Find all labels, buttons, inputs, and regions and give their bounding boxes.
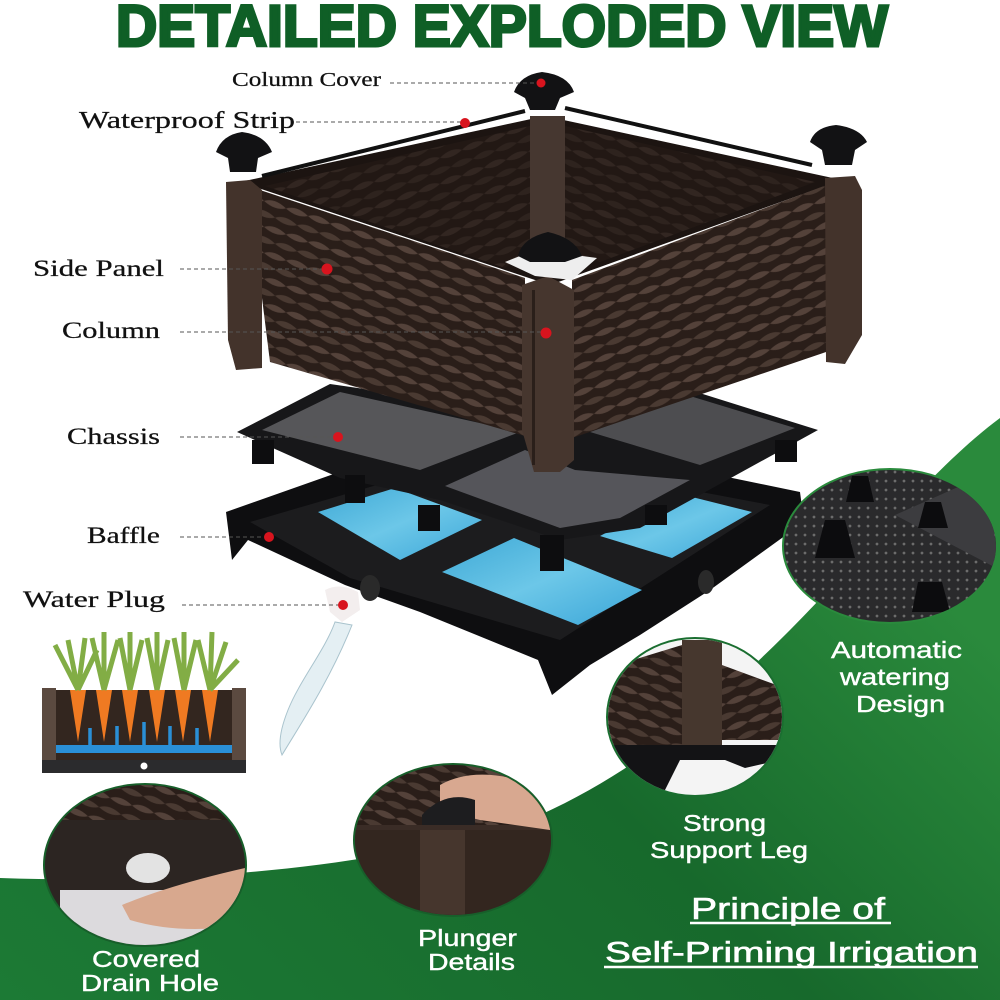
label: Column Cover — [232, 69, 546, 91]
back column — [530, 116, 565, 246]
text: Automatic watering Design: Automatic — [831, 637, 962, 663]
label: Waterproof Strip: Waterproof Strip — [79, 108, 295, 134]
text: Principle of Self-Priming Irrigation: Self-Priming Irrigation — [605, 937, 978, 969]
label: Chassis — [67, 424, 343, 449]
carrots — [70, 690, 218, 742]
white rim strips — [505, 252, 597, 280]
circle: plunger details — [353, 763, 555, 920]
right side panel — [572, 183, 832, 438]
circle: covered drain hole — [40, 780, 250, 950]
label: Column: Column — [62, 318, 161, 343]
label: Chassis: Chassis — [67, 424, 160, 449]
label: Column — [62, 318, 552, 343]
text: Strong Support Leg: Strong — [683, 810, 766, 836]
planter exploded illustration — [226, 116, 862, 695]
text: Covered Drain Hole: Covered — [92, 946, 200, 972]
label: Column Cover: Column Cover — [232, 69, 381, 91]
text: Covered Drain Hole — [81, 946, 219, 996]
planter inner walls — [240, 116, 842, 285]
text: Strong Support Leg — [650, 810, 808, 863]
columns — [226, 180, 262, 370]
circle: strong support leg — [600, 637, 790, 797]
label: Baffle — [87, 523, 274, 548]
water stream — [280, 622, 352, 755]
blue arrows — [90, 722, 197, 746]
text: Automatic watering Design — [831, 637, 962, 717]
column cover icons — [216, 72, 867, 262]
text: Plunger Details: Plunger — [418, 925, 517, 951]
water reservoir baffle — [226, 430, 804, 695]
left side panel — [248, 186, 525, 436]
text: Covered Drain Hole: Drain Hole — [81, 970, 219, 996]
waterproof strips — [262, 108, 812, 176]
text: Plunger Details: Details — [428, 949, 515, 975]
text: Principle of Self-Priming Irrigation: Principle of — [691, 891, 885, 926]
text: Automatic watering Design: watering — [839, 664, 950, 690]
label: Baffle: Baffle — [87, 523, 160, 548]
label: Water Plug — [23, 587, 348, 612]
chassis tray — [237, 384, 818, 571]
label: Side Panel: Side Panel — [33, 256, 164, 281]
circle: automatic watering — [782, 468, 1000, 624]
text: Strong Support Leg: Support Leg — [650, 837, 808, 863]
water plug — [325, 586, 360, 622]
label: Water Plug: Water Plug — [23, 587, 166, 612]
green background wave — [0, 418, 1000, 1000]
carrot leaves — [55, 632, 238, 690]
label: Waterproof Strip — [79, 108, 470, 134]
text: Plunger Details — [418, 925, 517, 975]
carrot diagram — [42, 632, 246, 773]
text: Automatic watering Design: Design — [856, 691, 945, 717]
label: Side Panel — [33, 256, 332, 281]
text: Principle of Self-Priming Irrigation — [604, 891, 978, 969]
